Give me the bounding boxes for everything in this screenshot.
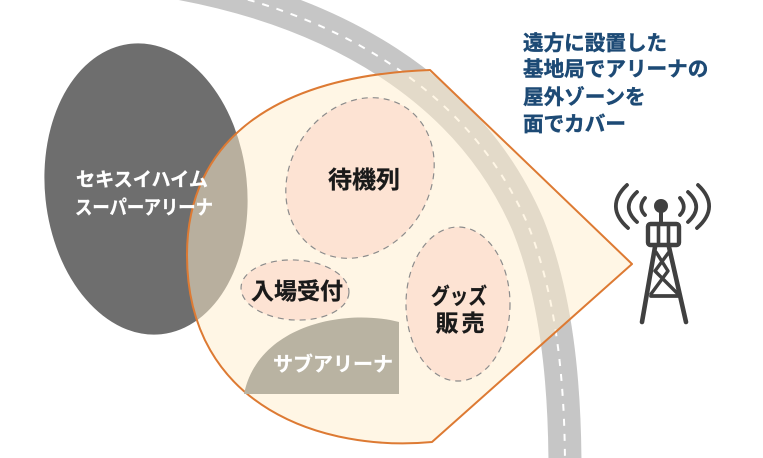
sub arena xyxy=(244,317,399,394)
zone: waiting line xyxy=(256,70,464,286)
heading: 屋外ゾーンを xyxy=(523,86,646,109)
zone: merchandise xyxy=(406,227,510,381)
zone: merchandise: 販売 xyxy=(436,310,484,336)
road xyxy=(160,0,565,458)
zone: waiting line: 待機列 xyxy=(328,167,400,194)
heading: 面でカバー xyxy=(523,113,626,136)
arena ellipse xyxy=(30,33,262,345)
icon: antenna tower xyxy=(616,185,709,322)
sub arena: サブアリーナ xyxy=(273,352,393,376)
heading: 基地局でアリーナの xyxy=(523,58,708,81)
arena label: スーパーアリーナ xyxy=(75,197,213,219)
heading: 遠方に設置した xyxy=(523,32,667,55)
arena label xyxy=(75,169,213,219)
signal coverage area xyxy=(187,70,632,443)
zone: reception xyxy=(240,257,350,323)
arena label: セキスイハイム xyxy=(76,169,208,191)
zone: merchandise: グッズ xyxy=(431,284,487,309)
zone: reception: 入場受付 xyxy=(251,278,343,304)
heading xyxy=(523,32,708,136)
